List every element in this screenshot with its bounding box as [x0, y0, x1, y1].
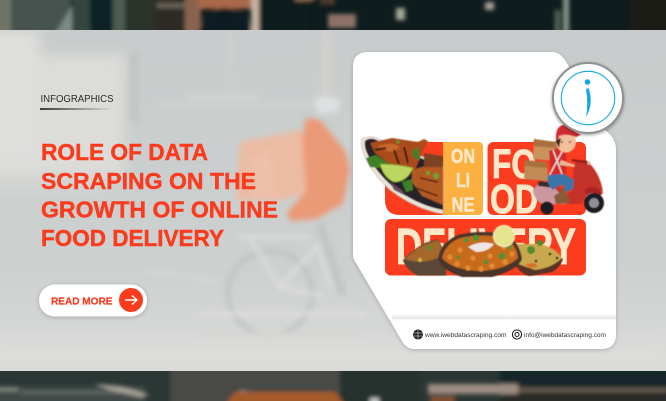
heading label: INFOGRAPHICS: INFOGRAPHICS — [40, 94, 114, 105]
read more button: READ MORE — [51, 296, 113, 307]
card footer with contact details — [392, 314, 616, 340]
parcels — [524, 139, 557, 181]
card graphic: online food tile: LI — [456, 170, 470, 192]
title: SCRAPING ON THE — [41, 168, 256, 194]
icon: lime slice — [380, 164, 413, 182]
right bowl — [516, 240, 563, 276]
rider — [548, 125, 581, 204]
card graphic: food tile: FO — [492, 141, 536, 187]
title — [41, 139, 278, 251]
icon: delivery rider on scooter — [524, 125, 604, 214]
blurred street photo: bottom strip — [0, 371, 666, 401]
card graphic: food tile — [488, 141, 586, 222]
email: info@iwebdatascraping.com — [524, 332, 606, 339]
icon: bowls of food — [403, 226, 563, 277]
center bowl — [438, 226, 522, 277]
card graphic: online food tile: ON — [451, 146, 475, 168]
card graphic: delivery tile: DELIVERY — [396, 218, 576, 275]
title: FOOD DELIVERY — [41, 225, 224, 251]
card graphic: online food tile — [385, 142, 483, 216]
icon: arrow in circle — [119, 288, 143, 312]
website: www.iwebdatascraping.com — [424, 332, 507, 339]
card graphic: online food tile: NE — [452, 194, 474, 216]
scooter — [533, 160, 604, 214]
title: ROLE OF DATA — [41, 139, 208, 165]
icon: at sign — [512, 330, 522, 339]
white card panel — [353, 52, 616, 349]
logo badge — [553, 63, 623, 133]
icon: plate of grilled chicken — [361, 137, 443, 214]
card graphic: food tile: OD — [490, 176, 538, 222]
title: GROWTH OF ONLINE — [41, 196, 278, 222]
read more button — [39, 284, 147, 316]
heading label: INFOGRAPHICS — [40, 94, 114, 110]
icon: lime wedge — [494, 226, 514, 246]
left bowl — [403, 239, 446, 276]
icon: globe — [413, 330, 423, 340]
blurred street photo: top strip — [0, 0, 666, 30]
